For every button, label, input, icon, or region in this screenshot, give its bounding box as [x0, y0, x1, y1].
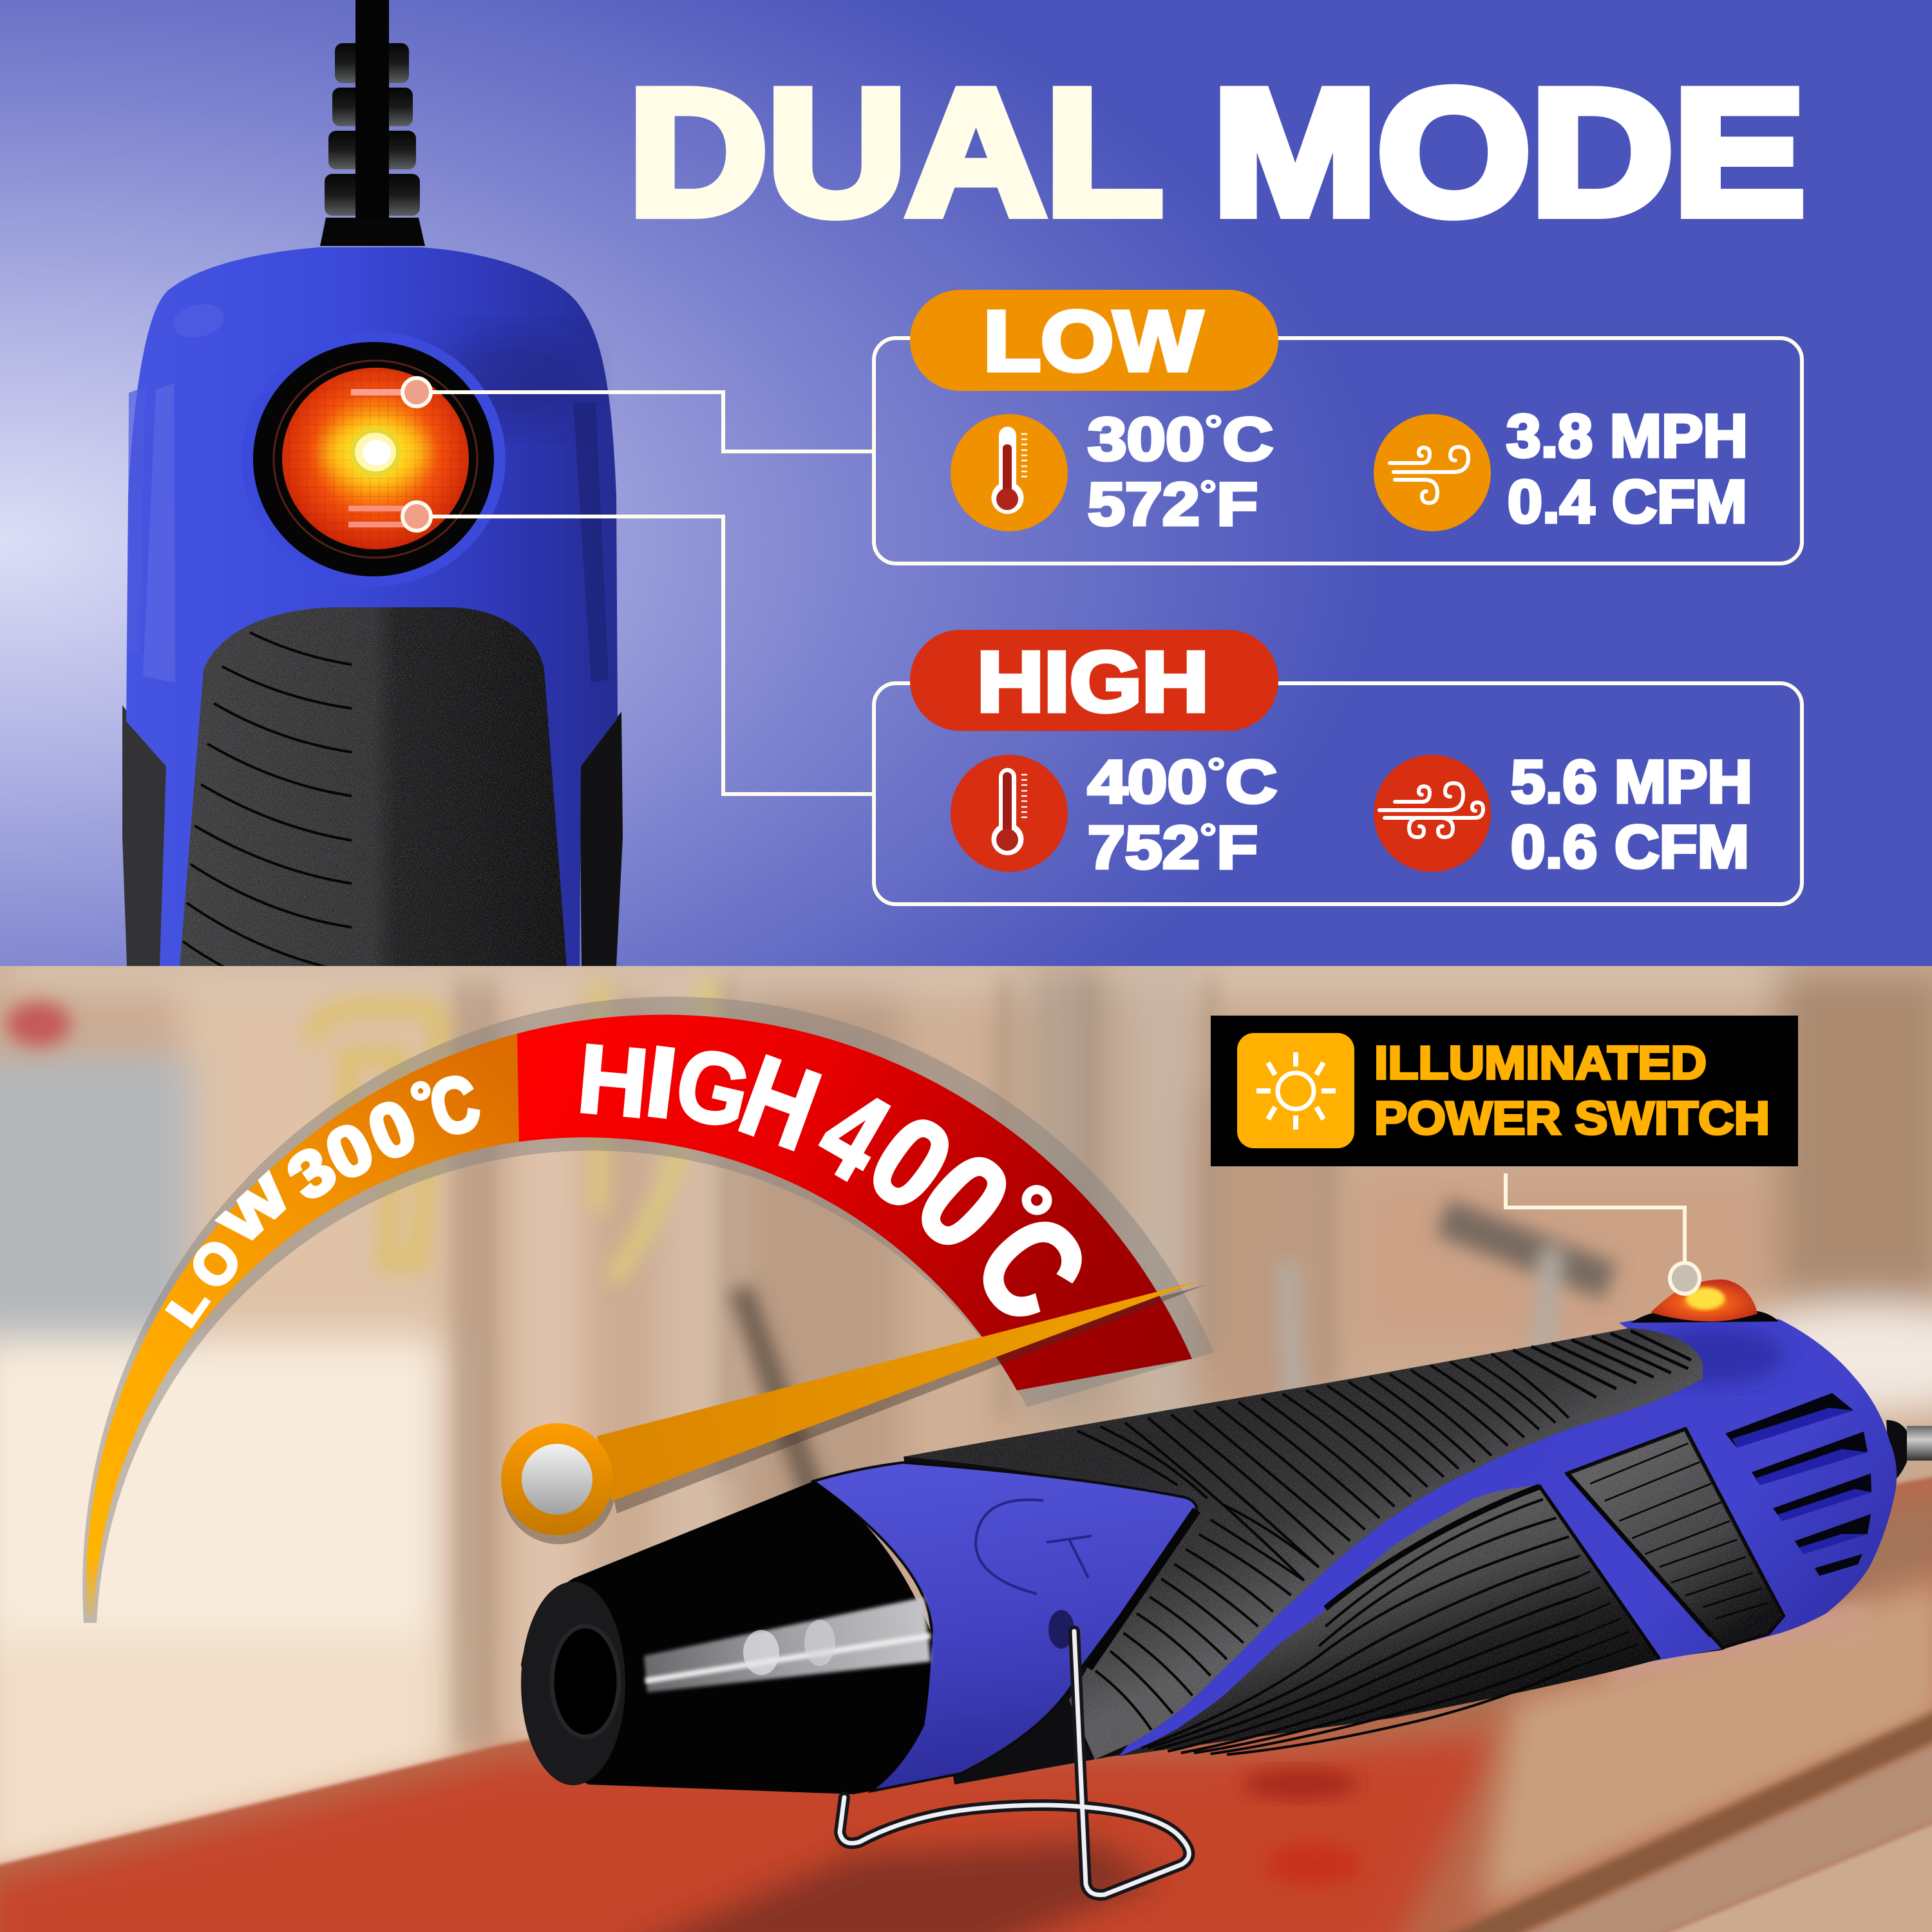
high temperature text: C [1226, 748, 1277, 815]
gauge label low: O [177, 1227, 254, 1301]
icon: wind high [1374, 755, 1491, 872]
gun upper grip [904, 1328, 1703, 1759]
red wooden table [0, 1475, 1932, 1932]
gauge label high: H [574, 1023, 652, 1138]
rear grip rib lines [1513, 1331, 1767, 1666]
gauge label high: 0 [889, 1123, 1039, 1279]
low temperature text [1088, 405, 1273, 538]
LOW pill [910, 290, 1278, 391]
high airflow text [1511, 748, 1752, 880]
gauge label high: C [944, 1186, 1117, 1350]
title [629, 52, 1805, 252]
gun blue housing and ribbon [1119, 1314, 1897, 1756]
high temperature text: F [1217, 813, 1258, 881]
housing small bump [170, 299, 227, 342]
panel: LOW mode [874, 290, 1802, 564]
temperature gauge [82, 997, 1214, 1623]
low temperature text: ° [1200, 473, 1217, 516]
gauge label low [157, 1059, 488, 1336]
gauge label high: 4 [797, 1063, 910, 1207]
product: heat gun on stand [521, 1263, 1932, 1895]
gauge halo [82, 997, 1214, 1623]
shadow beneath the heat gun [612, 1842, 1159, 1932]
panel: LOW mode: LOW [983, 294, 1202, 388]
gauge label low: ° [404, 1069, 444, 1133]
gun lower grip [1119, 1485, 1660, 1756]
cord strain relief [320, 39, 425, 246]
high temperature text: ° [1200, 816, 1217, 859]
high airflow text: 0.6 CFM [1511, 813, 1749, 880]
gauge label low: L [157, 1278, 218, 1336]
icon: wind low [1374, 414, 1491, 531]
title: MODE [1213, 52, 1805, 252]
gauge label high: I [639, 1025, 683, 1139]
gun grip texture [902, 1320, 1790, 1765]
high temperature text [1088, 748, 1277, 881]
stand mounting hole [1048, 1610, 1074, 1649]
callout text: POWER SWITCH [1374, 1093, 1770, 1144]
product: heat gun rear view with power cord [122, 0, 623, 1005]
panel: HIGH mode: HIGH [977, 634, 1209, 729]
gun body silhouette [904, 1320, 1783, 1785]
low temperature text: C [1222, 405, 1273, 473]
wire stand [840, 1631, 1189, 1895]
icon: thermometer low [951, 414, 1068, 531]
gauge label high: 0 [845, 1087, 977, 1238]
gauge low band [86, 1034, 519, 1616]
low marker [402, 378, 431, 406]
connector lines from switch to LOW and HIGH panels [402, 378, 875, 794]
panel dark edge [1088, 1510, 1197, 1668]
callout connector line [1506, 1173, 1685, 1264]
nozzle opening [521, 1582, 625, 1785]
high temperature text: 752 [1088, 813, 1189, 881]
illuminated switch lens [274, 361, 477, 558]
gun cord plug [1886, 1420, 1932, 1484]
high temperature text: ° [1207, 750, 1226, 793]
needle [597, 1281, 1199, 1501]
high temperature text: 400 [1088, 748, 1189, 815]
gauge label high: ° [984, 1164, 1069, 1265]
HIGH pill [910, 630, 1278, 731]
gun rear grip [1567, 1429, 1783, 1647]
nozzle highlight [644, 1597, 931, 1692]
top panel background [0, 0, 1932, 966]
callout text [1374, 1037, 1770, 1144]
icon: thermometer high [951, 755, 1068, 872]
panel: HIGH mode [874, 630, 1802, 904]
gun vents [1725, 1393, 1871, 1576]
CT logo [976, 1500, 1092, 1594]
side grip black panels [122, 705, 623, 966]
low airflow text: 3.8 MPH [1506, 402, 1748, 469]
high airflow text: 5.6 MPH [1511, 748, 1752, 815]
gun grip rib lines [1077, 1354, 1578, 1754]
illuminated switch on gun [1631, 1280, 1779, 1323]
gun nozzle [521, 1481, 932, 1794]
power cord [355, 0, 389, 39]
bottom panel: blurred workshop background [0, 953, 1932, 1932]
housing side ridges [128, 383, 609, 683]
low airflow text [1506, 402, 1748, 535]
low temperature text: F [1217, 470, 1258, 538]
gauge label low: C [422, 1059, 488, 1153]
blue housing [126, 247, 618, 966]
switch marker [1670, 1263, 1700, 1294]
gauge label high: H [726, 1030, 835, 1175]
power switch bezel [242, 332, 506, 587]
blurred tools and stripes [6, 1001, 71, 1046]
gauge label low: 0 [357, 1084, 427, 1177]
low temperature text: ° [1205, 408, 1222, 451]
low temperature text: 300 [1088, 405, 1189, 473]
callout: illuminated power switch [1211, 1016, 1798, 1166]
gauge label low: 0 [314, 1107, 384, 1195]
needle hub [501, 1423, 613, 1535]
shadow under switch [1642, 1327, 1784, 1385]
central textured grip [174, 605, 573, 1005]
icon: sun [1237, 1033, 1354, 1148]
gauge high band [517, 1015, 1192, 1390]
low temperature text: 572 [1088, 470, 1189, 538]
title: DUAL [629, 52, 1163, 252]
gauge label high: G [666, 1025, 761, 1151]
gauge label low: W [210, 1164, 302, 1256]
low airflow text: 0.4 CFM [1508, 468, 1747, 535]
gauge label low: 3 [275, 1133, 348, 1214]
callout text: ILLUMINATED [1374, 1037, 1707, 1089]
housing shadow near switch [444, 335, 586, 425]
needle shadow [602, 1285, 1206, 1513]
high marker [402, 502, 431, 531]
gauge label high [574, 1023, 1117, 1350]
gun front blue section [813, 1463, 1197, 1791]
